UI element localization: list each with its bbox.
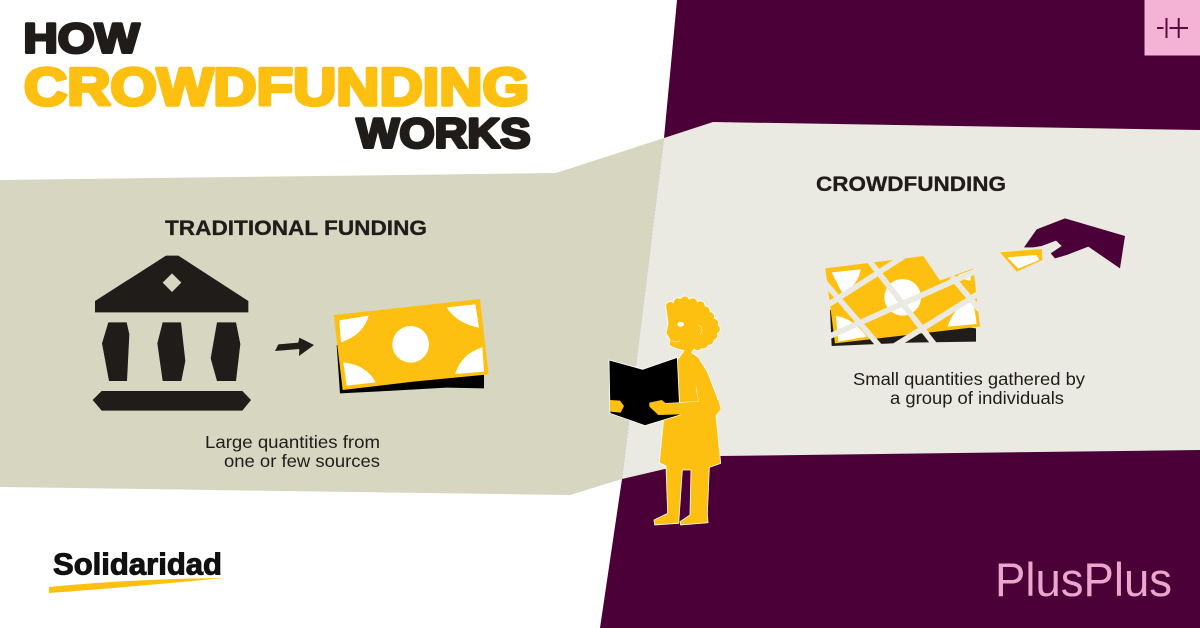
icon: fragmented banknote	[824, 256, 982, 347]
icon: hand giving money fragment	[1000, 218, 1125, 272]
panel: purple background	[600, 0, 1200, 628]
text: crowdfunding description: Small quantities gathered by	[853, 369, 1085, 389]
arrow: bank to money	[275, 338, 314, 356]
illustration: person reading a book	[609, 296, 721, 525]
title	[24, 14, 530, 156]
text: crowdfunding description: a group of individuals	[890, 388, 1064, 408]
text: traditional funding description: Large quantities from	[205, 432, 380, 452]
logo tab: pink corner mark	[1144, 0, 1200, 56]
text: traditional funding description: one or few sources	[224, 451, 380, 471]
text: traditional funding description	[205, 432, 380, 471]
text: crowdfunding description	[853, 369, 1085, 408]
logo: Solidaridad: Solidaridad	[53, 548, 222, 582]
title line: how: HOW	[24, 14, 140, 62]
icon: bank building	[93, 256, 251, 411]
icon: large banknote	[334, 299, 489, 393]
title line: works: WORKS	[356, 110, 530, 156]
title line: crowdfunding: CROWDFUNDING	[24, 58, 529, 117]
panel: crowdfunding band	[622, 122, 1200, 479]
heading: crowdfunding: CROWDFUNDING	[816, 173, 1006, 196]
heading: traditional funding: TRADITIONAL FUNDING	[165, 217, 427, 240]
logo: PlusPlus: PlusPlus	[995, 553, 1172, 606]
panel: traditional funding band	[0, 138, 664, 495]
